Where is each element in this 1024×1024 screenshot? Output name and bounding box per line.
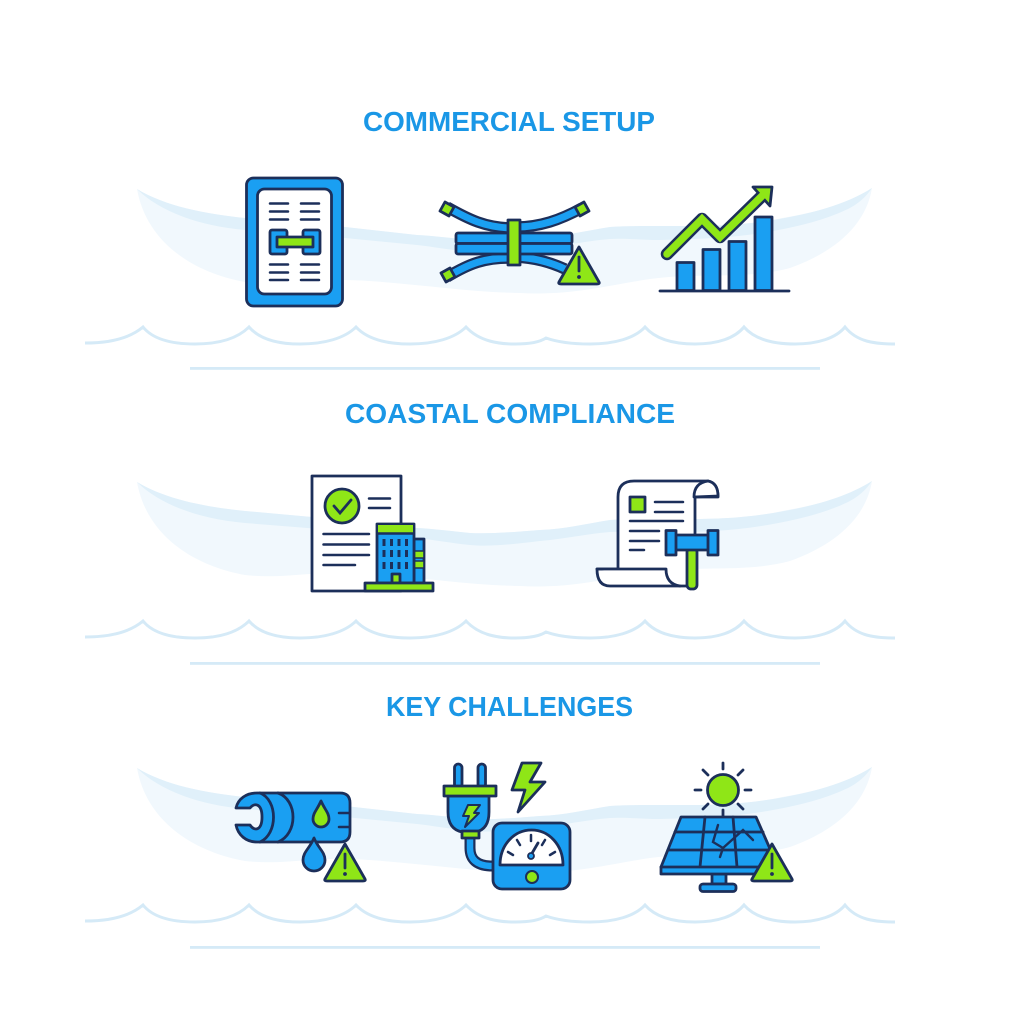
section: key challenges (85, 691, 895, 949)
section: commercial setup (85, 106, 895, 370)
heading: key challenges: KEY CHALLENGES (386, 691, 633, 722)
wave line (85, 905, 895, 922)
icon: legal scroll with gavel (597, 481, 718, 589)
icon: bundled cables with warning (440, 202, 599, 284)
heading: coastal compliance: COASTAL COMPLIANCE (345, 398, 675, 429)
section: coastal compliance (85, 398, 895, 665)
background swoosh (137, 188, 872, 294)
wave line (85, 621, 895, 638)
divider rule (190, 367, 820, 370)
icon: contract document with connector (246, 178, 342, 306)
icon: leaking pipe (236, 793, 365, 881)
icon: plug and power meter (444, 763, 570, 889)
divider rule (190, 662, 820, 665)
background swoosh (137, 767, 872, 873)
icon: approved document with building (312, 476, 433, 591)
icon: growth bar chart with arrow (660, 187, 789, 291)
divider rule (190, 946, 820, 949)
heading: commercial setup: COMMERCIAL SETUP (363, 106, 655, 137)
wave line (85, 327, 895, 344)
icon: cracked solar panel with sun (661, 763, 792, 892)
background swoosh (137, 481, 872, 587)
